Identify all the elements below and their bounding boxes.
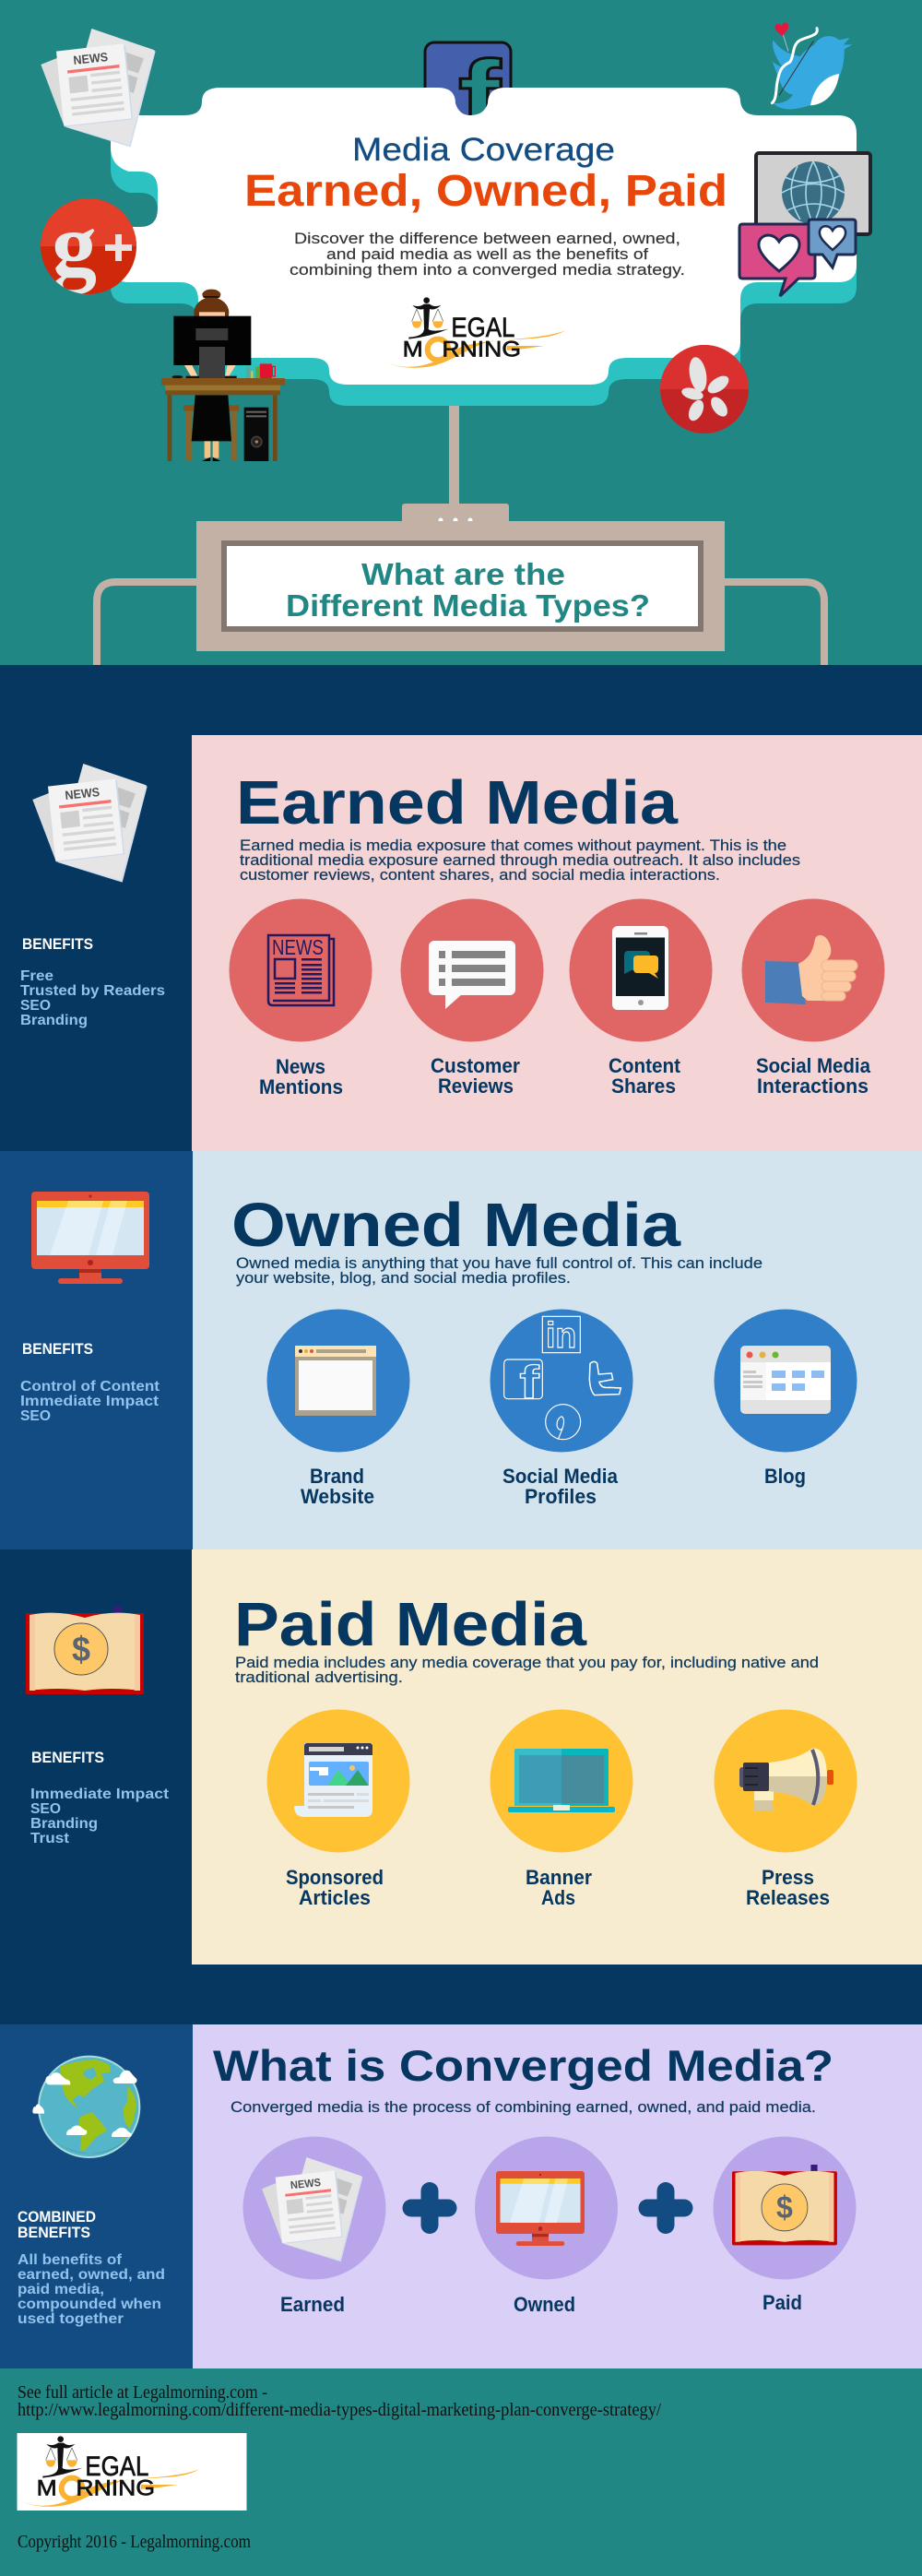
signboard: what are the different media types: Different Media Types? <box>286 588 650 623</box>
icon: newspaper earned: NEWS <box>65 785 100 802</box>
text: copyright: Copyright 2016 - Legalmorning.com <box>18 2532 251 2552</box>
item: sponsored articles: Articles <box>299 1886 371 1909</box>
panel: earned media sidebar <box>0 665 922 1151</box>
icon: newspaper header: NEWS <box>73 50 109 67</box>
item: brand website: Website <box>301 1485 374 1508</box>
item: social media interactions: Interactions <box>757 1074 869 1098</box>
panel: converged media sidebar <box>0 2024 193 2368</box>
icon: earth globe <box>32 2057 139 2157</box>
icon: plus two <box>647 2191 684 2225</box>
shape: cyan card shadow <box>111 109 857 406</box>
text: paid description: traditional advertising. <box>235 1669 403 1686</box>
item: customer reviews: Customer <box>431 1054 520 1077</box>
list: paid benefits: SEO <box>30 1801 61 1817</box>
panel: paid media <box>192 1549 922 1965</box>
text: combined benefits description: paid media, <box>18 2282 104 2297</box>
item: earned <box>243 2136 385 2316</box>
list: earned benefits <box>20 968 165 1028</box>
item: banner ads: Banner <box>526 1866 592 1889</box>
list: earned benefits: Branding <box>20 1013 88 1028</box>
item: content shares: Shares <box>611 1074 676 1098</box>
text: combined benefits description: earned, owned, and <box>18 2267 165 2283</box>
item: brand website: Brand <box>310 1465 364 1488</box>
text: earned description: Earned media is media exposure that comes without payment. This is the <box>240 837 786 854</box>
list: paid benefits: Immediate Impact <box>30 1787 170 1802</box>
list: owned benefits: SEO <box>20 1408 51 1424</box>
panel: paid media sidebar <box>0 1549 922 2025</box>
item: paid: $ <box>776 2190 793 2226</box>
icon: book paid: $ <box>72 1631 90 1669</box>
item: banner ads <box>491 1710 632 1909</box>
item: sponsored articles <box>267 1710 409 1909</box>
icon: google plus <box>41 196 136 295</box>
item: social media profiles: Profiles <box>525 1485 597 1508</box>
item: news mentions: News <box>276 1055 325 1078</box>
icon: book paid <box>26 1606 144 1694</box>
list: owned benefits: Control of Content <box>20 1379 160 1395</box>
logo: footer box: MORNING <box>37 2476 155 2501</box>
title: earned owned paid: Earned, Owned, Paid <box>244 167 727 216</box>
item: news mentions: NEWS <box>272 935 324 959</box>
heading: combined benefits <box>18 2208 96 2241</box>
panel: converged media <box>193 2024 922 2368</box>
heading: earned benefits: BENEFITS <box>22 935 93 953</box>
icon: facebook: f <box>458 40 502 158</box>
text: earned description: customer reviews, content shares, and social media interactions. <box>240 867 720 884</box>
panel: owned media <box>193 1151 922 1549</box>
item: brand website <box>267 1310 409 1508</box>
text: source link <box>18 2382 661 2420</box>
item: owned <box>475 2136 618 2316</box>
list: owned benefits <box>20 1379 160 1424</box>
icon: google plus: g <box>52 196 97 295</box>
icon: twitter bird <box>772 22 852 109</box>
item: social media interactions: Social Media <box>756 1054 871 1077</box>
item: social media interactions <box>741 898 885 1098</box>
item: social media profiles: Social Media <box>502 1465 619 1488</box>
list: earned benefits: SEO <box>20 998 51 1014</box>
logo: Legal Morning header: MORNING <box>403 338 521 362</box>
item: press releases: Releases <box>746 1886 830 1909</box>
heading: combined benefits: BENEFITS <box>18 2224 90 2241</box>
item: press releases <box>714 1710 857 1909</box>
item: sponsored articles: Sponsored <box>286 1866 384 1889</box>
logo: Legal Morning header <box>385 297 565 368</box>
text: paid description: Paid media includes any media coverage that you pay for, including native and <box>235 1655 819 1671</box>
item: earned: Earned <box>280 2293 345 2316</box>
text: intro paragraph: Discover the difference between earned, owned, <box>294 230 680 247</box>
item: banner ads: Ads <box>541 1886 575 1909</box>
text: source link: http://www.legalmorning.com/different-media-types-digital-marketing-plan-converge-strategy/ <box>18 2400 661 2420</box>
item: social media profiles: in <box>546 1315 576 1356</box>
text: earned description: traditional media exposure earned through media outreach. It also includes <box>240 852 800 869</box>
heading: owned media: Owned Media <box>231 1191 681 1260</box>
panel: owned media sidebar <box>0 1151 193 1549</box>
logo: Legal Morning header: EGAL <box>451 313 514 343</box>
icon: monitor owned <box>31 1192 149 1284</box>
item: paid <box>714 2136 856 2314</box>
item: paid: Paid <box>762 2291 802 2314</box>
signboard: what are the different media types: What are the <box>361 557 565 591</box>
panel: header background <box>0 0 922 666</box>
text: combined benefits description: All benefits of <box>18 2252 123 2268</box>
panel: footer <box>0 2368 922 2576</box>
heading: paid benefits: BENEFITS <box>31 1749 104 1766</box>
panel: earned media <box>192 735 922 1151</box>
heading: paid media: Paid Media <box>234 1590 587 1659</box>
illustration: woman at desk <box>161 290 285 461</box>
text: converged description: Converged media is the process of combining earned, owned, and paid media. <box>230 2099 816 2116</box>
text: combined benefits description: compounded when <box>18 2297 161 2312</box>
item: blog <box>714 1310 857 1488</box>
item: owned: Owned <box>514 2293 575 2316</box>
icon: globe monitor <box>756 153 870 234</box>
heading: owned benefits: BENEFITS <box>22 1340 93 1358</box>
text: intro paragraph: combining them into a converged media strategy. <box>290 261 685 279</box>
title: media coverage: Media Coverage <box>352 132 615 168</box>
text: owned description: your website, blog, and social media profiles. <box>236 1270 571 1287</box>
text: source link: See full article at Legalmorning.com - <box>18 2382 267 2403</box>
icon: newspaper header <box>41 29 156 148</box>
item: earned: NEWS <box>290 2177 322 2191</box>
item: social media profiles <box>491 1310 632 1508</box>
item: news mentions <box>229 898 372 1098</box>
text: paid description <box>235 1655 819 1686</box>
item: customer reviews: Reviews <box>438 1074 514 1098</box>
heading: what is converged media: What is Converged Media? <box>213 2041 833 2090</box>
logo: footer box <box>17 2433 247 2511</box>
list: paid benefits: Trust <box>30 1831 70 1846</box>
logo: footer box: EGAL <box>85 2451 148 2482</box>
list: paid benefits: Branding <box>30 1816 98 1832</box>
text: combined benefits description <box>18 2252 165 2327</box>
item: customer reviews <box>400 898 544 1098</box>
signboard: what are the different media types <box>97 406 824 666</box>
item: social media profiles: f <box>519 1357 539 1408</box>
icon: plus one <box>411 2191 448 2225</box>
shape: white title card <box>111 88 857 385</box>
text: earned description <box>240 837 800 884</box>
item: content shares <box>570 898 712 1098</box>
item: press releases: Press <box>762 1866 814 1889</box>
heading: earned media: Earned Media <box>236 768 679 837</box>
text: intro paragraph: and paid media as well as the benefits of <box>326 245 648 263</box>
text: intro paragraph <box>290 230 685 279</box>
list: earned benefits: Trusted by Readers <box>20 983 165 999</box>
icon: heart speech bubbles <box>739 220 856 296</box>
item: news mentions: Mentions <box>259 1075 343 1098</box>
heading: combined benefits: COMBINED <box>18 2208 96 2226</box>
item: blog: Blog <box>764 1465 806 1488</box>
text: owned description: Owned media is anything that you have full control of. This can include <box>236 1255 762 1272</box>
text: owned description <box>236 1255 762 1287</box>
list: earned benefits: Free <box>20 968 53 984</box>
list: paid benefits <box>30 1787 170 1846</box>
icon: facebook <box>425 40 511 158</box>
icon: newspaper earned <box>32 764 148 883</box>
list: owned benefits: Immediate Impact <box>20 1394 160 1409</box>
item: content shares: Content <box>609 1054 681 1077</box>
text: combined benefits description: used together <box>18 2311 124 2327</box>
icon: yelp <box>660 345 749 433</box>
